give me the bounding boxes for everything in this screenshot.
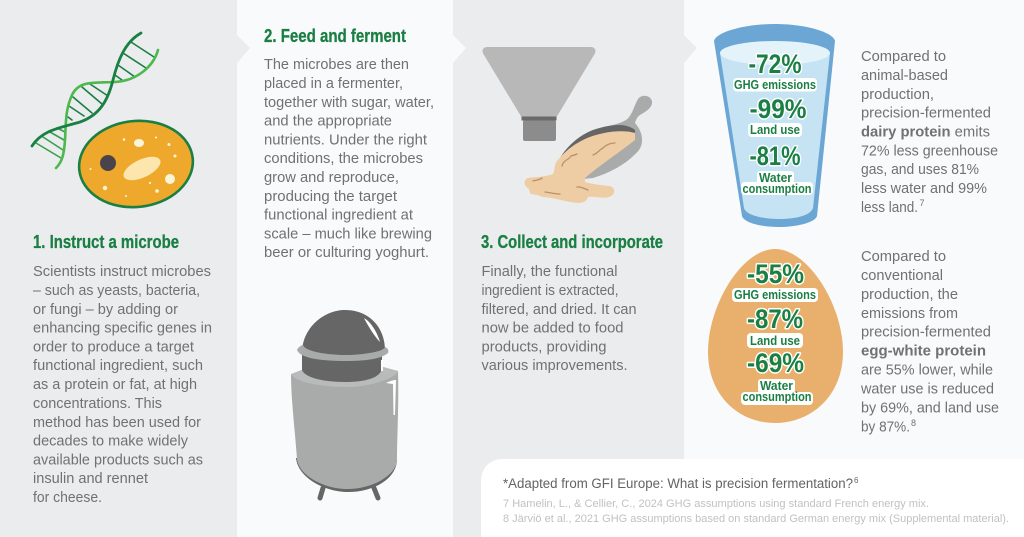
- text block: egg-white protein comparison: Compared to: [861, 249, 946, 265]
- icon: egg with egg-white protein stats: [708, 249, 843, 423]
- text block: step 1: enhancing specific genes in: [33, 320, 212, 336]
- text block: egg-white protein comparison: conventional: [861, 268, 943, 284]
- icon: DNA helix: [32, 33, 158, 168]
- text block: dairy protein comparison: Compared to: [861, 49, 946, 65]
- text block: step 3: now be added to food: [482, 320, 624, 336]
- references: [503, 498, 1009, 525]
- text block: step 3: [482, 264, 636, 374]
- icon: fermenter tank: [291, 310, 398, 498]
- text block: step 1: order to produce a target: [33, 340, 194, 356]
- text block: dairy protein comparison: gas, and uses 81%: [861, 162, 979, 178]
- heading: step 1: 1. Instruct a microbe: [33, 232, 179, 252]
- references: 7 Hamelin, L., & Cellier, C., 2024 GHG assumptions using standard French energy mix.: [503, 498, 929, 510]
- text block: step 3: ingredient is extracted,: [482, 283, 618, 299]
- text block: step 2: grow and reproduce,: [264, 170, 399, 186]
- text block: egg-white protein comparison: [860, 249, 999, 436]
- text block: dairy protein comparison: dairy protein emits: [861, 124, 990, 140]
- heading: step 3: 3. Collect and incorporate: [481, 232, 663, 252]
- source note: 6: [854, 476, 859, 485]
- text block: step 1: [33, 264, 212, 506]
- text block: egg-white protein comparison: emissions from: [861, 306, 958, 322]
- text block: egg-white protein comparison: are 55% lower, while: [861, 362, 993, 378]
- stat: -87% land use: Land use: [750, 333, 800, 348]
- text block: step 1: decades to make widely: [33, 434, 189, 450]
- stat: -99% land use: [748, 94, 806, 137]
- text block: step 1: – such as yeasts, bacteria,: [33, 283, 200, 299]
- icon: scoop with powder: [525, 96, 652, 203]
- references: 8 Järviö et al., 2021 GHG assumptions based on standard German energy mix (Supplemental material).: [503, 513, 1009, 525]
- stat: -55% GHG emissions: -55%: [747, 259, 804, 289]
- text block: step 1: insulin and rennet: [33, 471, 148, 487]
- text block: egg-white protein comparison: egg-white protein: [861, 344, 986, 360]
- text block: dairy protein comparison: less land.: [861, 200, 918, 216]
- stat: -69% water consumption: Water: [760, 378, 793, 393]
- text block: egg-white protein comparison: precision-fermented: [861, 324, 991, 340]
- text block: step 2: scale – much like brewing: [264, 226, 432, 242]
- stat: -87% land use: -87%: [747, 304, 803, 334]
- text block: step 2: together with sugar, water,: [264, 95, 434, 111]
- icon: glass with dairy protein stats: [714, 24, 835, 227]
- text block: step 2: [264, 57, 434, 261]
- text block: step 2: The microbes are then: [264, 57, 409, 73]
- stat: -72% GHG emissions: -72%: [748, 49, 802, 79]
- stat: -55% GHG emissions: GHG emissions: [734, 287, 816, 302]
- text block: egg-white protein comparison: 8: [911, 418, 916, 428]
- icon: microbe cell: [75, 115, 197, 213]
- text block: egg-white protein comparison: by 69%, and land use: [861, 400, 999, 416]
- text block: step 1: Scientists instruct microbes: [33, 264, 211, 280]
- text block: step 1: for cheese.: [33, 490, 102, 506]
- text block: step 3: Finally, the functional: [482, 264, 618, 280]
- text block: step 2: beer or culturing yoghurt.: [264, 245, 429, 261]
- text block: step 1: method has been used for: [33, 415, 201, 431]
- text block: step 2: nutrients. Under the right: [264, 132, 427, 148]
- stat: -69% water consumption: consumption: [742, 389, 812, 404]
- heading: step 2: 2. Feed and ferment: [264, 26, 406, 46]
- panel: footnotes: [481, 459, 1024, 537]
- text block: step 3: various improvements.: [482, 358, 628, 374]
- text block: egg-white protein comparison: by 87%.: [861, 420, 910, 436]
- stat: -99% land use: Land use: [750, 122, 800, 137]
- text block: step 1: functional ingredient, such: [33, 358, 203, 374]
- source note: *Adapted from GFI Europe: What is precision fermentation?: [503, 476, 853, 491]
- text block: step 1: as a protein or fat, at high: [33, 377, 197, 393]
- text block: step 2: conditions, the microbes: [264, 151, 423, 167]
- text block: step 2: functional ingredient at: [264, 208, 413, 224]
- panel: step 1 background: [0, 0, 250, 537]
- text block: step 2: placed in a fermenter,: [264, 76, 403, 92]
- icon: funnel: [483, 47, 595, 141]
- text block: step 2: and the appropriate: [264, 114, 392, 130]
- stat: -72% GHG emissions: GHG emissions: [734, 77, 816, 92]
- stat: -81% water consumption: -81%: [750, 141, 800, 171]
- text block: dairy protein comparison: 72% less greenhouse: [861, 144, 998, 160]
- panel: step 3 background: [453, 0, 697, 537]
- stat: -55% GHG emissions: [732, 259, 818, 302]
- text block: dairy protein comparison: production,: [861, 87, 934, 103]
- text block: egg-white protein comparison: water use is reduced: [860, 382, 994, 398]
- stat: -81% water consumption: Water: [759, 170, 792, 185]
- text block: dairy protein comparison: 7: [920, 198, 925, 208]
- text block: step 3: filtered, and dried. It can: [482, 302, 636, 318]
- stat: -69% water consumption: [741, 348, 813, 405]
- stat: -72% GHG emissions: [733, 49, 817, 92]
- text block: dairy protein comparison: less water and 99%: [861, 181, 987, 197]
- text block: step 1: available products such as: [33, 452, 203, 468]
- text block: step 3: products, providing: [482, 340, 606, 356]
- text block: step 2: producing the target: [264, 189, 397, 205]
- text block: step 1: or fungi – by adding or: [33, 302, 178, 318]
- stat: -87% land use: [747, 304, 803, 348]
- text block: egg-white protein comparison: production, the: [861, 287, 958, 303]
- text block: dairy protein comparison: [861, 49, 998, 216]
- text block: dairy protein comparison: animal-based: [861, 68, 948, 84]
- text block: step 1: concentrations. This: [33, 396, 162, 412]
- stat: -69% water consumption: -69%: [747, 348, 804, 378]
- text block: dairy protein comparison: precision-fermented: [861, 106, 991, 122]
- stat: -81% water consumption: [741, 141, 813, 196]
- stat: -99% land use: -99%: [750, 94, 806, 124]
- stat: -81% water consumption: consumption: [742, 181, 812, 196]
